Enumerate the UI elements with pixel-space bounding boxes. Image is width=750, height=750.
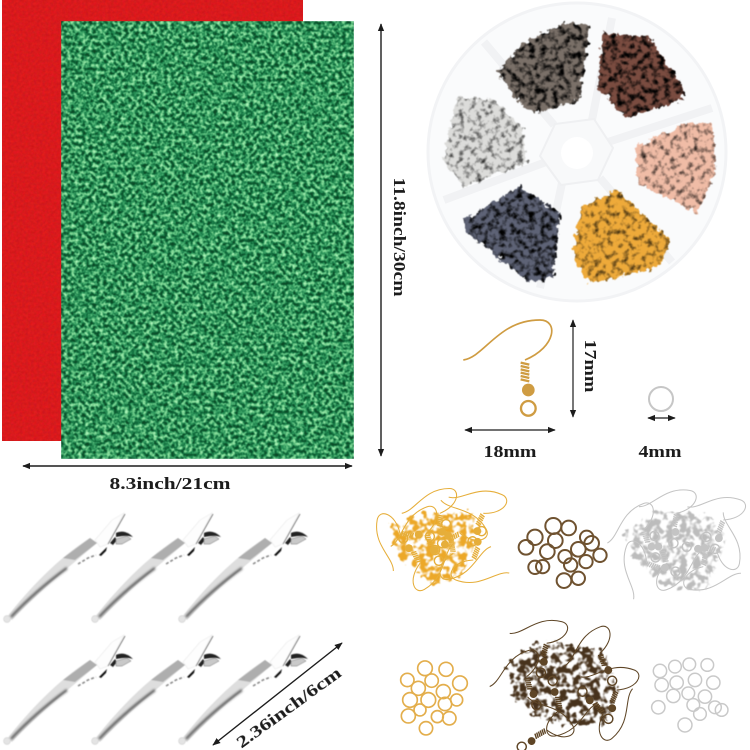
arrow: clip length [213,643,342,745]
cluster: gold jump rings [401,661,467,735]
panel: fabric sheets [2,0,354,459]
cluster: bronze jump rings [519,518,607,588]
wedge: gold hooks [573,190,670,283]
label: sheet width: 8.3inch/21cm [110,474,230,493]
panel: loose hooks and rings [369,475,748,750]
icon: single gold ear hook [463,320,552,416]
wedge: dark grey hooks [497,23,590,113]
hub hole [561,137,593,169]
arrow: sheet width [23,465,352,467]
green glitter sheet [61,21,354,459]
panel: hook and ring measurements [463,320,682,461]
wedge: navy hooks [463,187,560,283]
red leather sheet [2,0,303,441]
label: hook height: 17mm [581,339,600,393]
label: hook width: 18mm [484,442,536,461]
clip 5 [92,635,221,744]
clip 3 [179,513,308,622]
arrow: ring diameter [648,417,675,419]
icon: single jump ring [649,387,673,411]
panel: round six-compartment storage tray [428,3,726,301]
arrow: hook width [465,429,555,431]
tray disc [428,3,726,301]
tray hub [540,119,613,185]
clip 6 [179,635,308,744]
cluster: silver jump rings [652,658,728,732]
cluster: bronze hooks [483,609,649,750]
wedge: brown hooks [597,33,683,118]
label: ring diameter: 4mm [638,442,682,461]
cluster: gold hooks [369,475,521,596]
wedge: rose gold hooks [637,123,715,213]
label: clip length: 2.36inch/6cm [233,663,345,750]
panel: alligator clips [4,513,308,744]
arrow: sheet height [380,24,382,456]
wedge: silver hooks [443,97,527,187]
clip 2 [92,513,221,622]
clip 4 [4,635,133,744]
clip 1 [4,513,133,622]
arrow: hook height [572,320,574,417]
tray dividers [444,18,712,288]
label: sheet height: 11.8inch/30cm [390,178,409,296]
cluster: silver hooks [599,482,748,611]
